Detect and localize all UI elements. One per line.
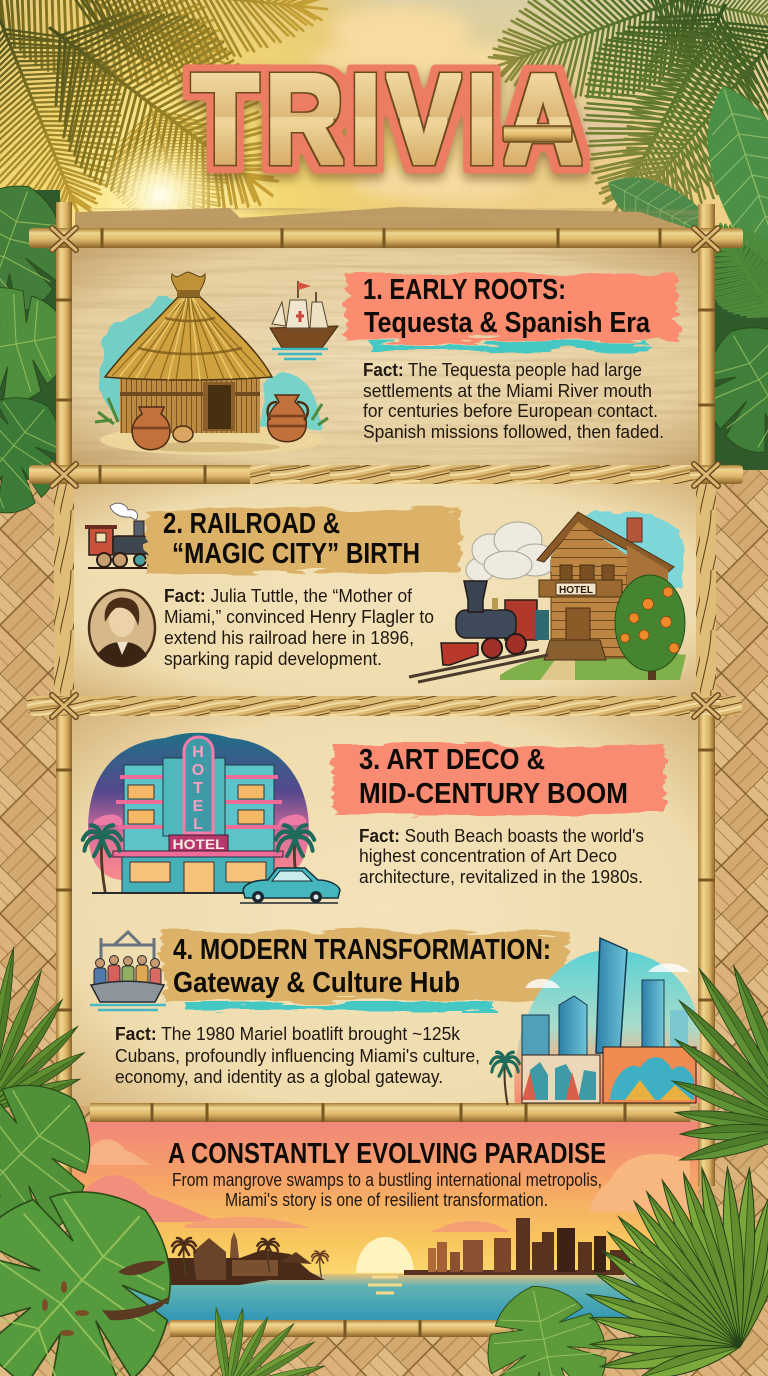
heading 1: Tequesta & Spanish Era	[364, 307, 651, 339]
heading 4	[173, 934, 551, 999]
rope bar three	[27, 696, 742, 716]
leaves: bottom center monstera	[475, 1274, 615, 1376]
fact 3	[359, 825, 644, 887]
bamboo frame verticals	[54, 202, 716, 1186]
section 1	[95, 272, 677, 455]
footer text: Miami's story is one of resilient transformation.	[225, 1189, 548, 1210]
panel: early roots background	[71, 248, 699, 466]
footer sun	[356, 1237, 414, 1273]
fact 3: architecture, revitalized in the 1980s.	[359, 866, 643, 887]
locomotive	[409, 650, 548, 682]
side leaves: upper left	[0, 167, 90, 531]
marquee sign: HOTEL	[172, 836, 225, 852]
footer left island	[157, 1232, 328, 1285]
hotel upper storeys	[124, 765, 274, 853]
heading brush coral	[345, 273, 677, 341]
fact 4: Fact: The 1980 Mariel boatlift brought ~125k	[115, 1023, 461, 1044]
heading 1: 1. EARLY ROOTS:	[363, 274, 566, 306]
fact 2: extend his railroad here in 1896,	[164, 627, 414, 648]
vertical neon sign	[192, 744, 204, 833]
vertical neon sign: L	[193, 816, 203, 833]
section 4	[90, 931, 700, 1104]
boat icon	[90, 932, 166, 1010]
heading 2: 2. RAILROAD &	[163, 508, 340, 540]
train and hotel illustration	[409, 510, 686, 682]
hut illustration	[95, 272, 328, 455]
clay pots	[132, 395, 308, 450]
leaves: bottom center palm	[211, 1307, 326, 1376]
heading 4: Gateway & Culture Hub	[173, 967, 460, 999]
heading underline teal	[370, 342, 647, 351]
heading 2: “MAGIC CITY” BIRTH	[172, 538, 420, 570]
train icon	[85, 503, 159, 568]
fact 1: Spanish missions followed, then faded.	[363, 421, 664, 442]
heading 3: MID-CENTURY BOOM	[359, 778, 628, 810]
bamboo bar top	[29, 228, 743, 248]
panel: footer sunset scene	[73, 1122, 698, 1322]
footer water	[73, 1274, 698, 1322]
palm fronds: top right	[465, 0, 768, 260]
vertical neon sign: H	[192, 744, 204, 761]
fact 1: for centuries before European contact.	[363, 400, 658, 421]
smoke	[466, 522, 557, 582]
modern skyline and mural illustration	[491, 938, 700, 1104]
fact 4: Cubans, profoundly influencing Miami's culture,	[115, 1045, 480, 1066]
background sky	[0, 0, 768, 260]
fact 1: Fact: The Tequesta people had large	[363, 359, 642, 380]
heading brush tan	[146, 509, 460, 573]
panel: art deco and modern background	[71, 716, 699, 1106]
ship icon	[270, 281, 338, 359]
leaves: bottom left palm	[0, 946, 88, 1116]
fact 3: Fact: South Beach boasts the world's	[359, 825, 644, 846]
section 2	[85, 503, 686, 682]
hotel building	[551, 560, 627, 658]
leaves: bottom left monstera	[0, 1045, 223, 1376]
leaves: bottom right fan palm	[584, 1166, 768, 1376]
section 3	[83, 733, 665, 903]
leaves: right palm upper	[669, 963, 768, 1167]
footer text: From mangrove swamps to a bustling international metropolis,	[172, 1169, 602, 1190]
fact 2	[164, 585, 434, 669]
lashings	[52, 228, 718, 717]
sun glow	[95, 140, 225, 250]
heading underline teal	[186, 1003, 496, 1011]
wood plank top	[75, 207, 700, 234]
fact 1	[363, 359, 664, 442]
vertical neon sign: E	[193, 798, 204, 815]
heading 4: 4. MODERN TRANSFORMATION:	[173, 934, 551, 966]
vertical neon sign: O	[192, 762, 204, 779]
bamboo bar four	[90, 1103, 690, 1122]
panel: railroad background	[71, 484, 699, 696]
heading 1	[363, 274, 651, 339]
fact 4: economy, and identity as a global gateway.	[115, 1066, 443, 1087]
bamboo bar five	[170, 1320, 505, 1337]
bamboo and rope bar two	[29, 465, 743, 484]
heading 3	[359, 744, 628, 810]
palms	[83, 825, 121, 892]
fact 2: Fact: Julia Tuttle, the “Mother of	[164, 585, 413, 606]
heading 3: 3. ART DECO &	[359, 744, 545, 776]
title: TRIVIA	[192, 48, 589, 189]
side leaves: upper right	[596, 74, 768, 469]
portrait of Julia Tuttle	[89, 590, 155, 666]
fact 3: highest concentration of Art Deco	[359, 845, 617, 866]
clouds	[310, 6, 630, 200]
heading brush coral	[333, 744, 665, 814]
A crossbar	[503, 126, 572, 142]
footer clouds	[85, 1139, 690, 1232]
orange tree	[648, 650, 656, 680]
murals	[522, 1055, 600, 1103]
palm fronds: top left	[0, 0, 334, 271]
fact 2: Miami,” convinced Henry Flagler to	[164, 606, 434, 627]
footer text	[172, 1169, 602, 1210]
heading brush tan	[164, 931, 568, 1001]
fact 2: sparking rapid development.	[164, 648, 382, 669]
footer right skyline	[404, 1218, 630, 1275]
classic car	[240, 868, 340, 903]
art deco hotel illustration	[83, 733, 340, 903]
fact 1: settlements at the Miami River mouth	[363, 380, 652, 401]
heading 2	[163, 508, 420, 570]
vertical neon sign: T	[193, 780, 203, 797]
footer heading: A CONSTANTLY EVOLVING PARADISE	[168, 1138, 606, 1170]
hotel sign: HOTEL	[559, 585, 593, 596]
fact 4	[115, 1023, 480, 1087]
